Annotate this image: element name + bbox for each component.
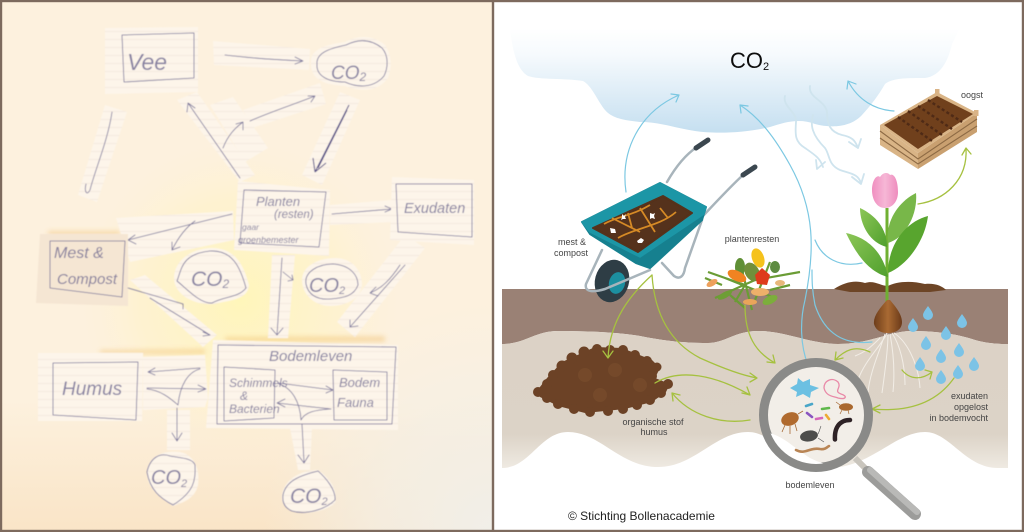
arrows: between fungi and fauna [277, 383, 333, 420]
card: Humus [38, 353, 143, 421]
arrow: Vee to manure [78, 105, 127, 202]
arrow: wheelbarrow to CO2 [625, 94, 679, 192]
soil: dark top layer [502, 289, 1008, 344]
soil mound [834, 282, 946, 292]
arrow: plants down to soil life [268, 255, 295, 338]
card: Exudaten: Exudaten [404, 201, 465, 217]
arrow: exudates to soil life [337, 235, 425, 337]
arrows: green flows to soil life and humus [603, 275, 954, 421]
organism: isopod [799, 426, 824, 443]
arrow: plants to exudates [330, 200, 392, 225]
card: Planten (resten) [234, 181, 330, 256]
arrow: soil life to CO2 [740, 105, 811, 365]
label: exudaten opgelost in bodemvocht: in bodemvocht [929, 413, 988, 423]
box: Schimmels & Bacterien: & [240, 389, 248, 403]
organism: blue protist [790, 378, 819, 398]
roots [855, 333, 920, 393]
arrows: manure to soil life [128, 275, 217, 347]
label: exudaten opgelost in bodemvocht: opgelost [954, 402, 988, 412]
icon: harvest crate [880, 89, 978, 169]
icon: wheelbarrow [582, 140, 755, 306]
icon: plant remains [705, 247, 800, 310]
text: CO2 title: CO [730, 48, 763, 73]
arrow: CO2 to plants [302, 92, 360, 185]
box: Schimmels & Bacterien [224, 367, 288, 421]
text: CO2 title: 2 [763, 61, 769, 73]
label: mest & compost [554, 237, 589, 258]
box: Bodem Fauna: Fauna [337, 395, 374, 410]
arrow: Vee to CO2 [213, 41, 310, 70]
card: Planten (resten): groenbemester [238, 235, 300, 245]
icon: magnifying glass with soil life [760, 362, 917, 514]
organism: brown mite [779, 410, 803, 434]
panel: illustrated carbon cycle [502, 52, 1008, 522]
organism: small bacteria [806, 404, 829, 419]
box: Bodem Fauna [333, 370, 387, 420]
arrows: humus and soil life exchange [143, 355, 208, 410]
cloud: CO2 atmosphere [510, 28, 960, 133]
cloud: CO2 from soil life: CO [290, 485, 322, 508]
tulip flower [872, 173, 898, 208]
cloud: CO2 middle left [174, 248, 249, 304]
arrow: harvest to CO2 [847, 81, 894, 111]
arrow: tulip to harvest [918, 148, 971, 204]
icon: tulip with bulb [834, 173, 946, 393]
soil: light lower layer [502, 331, 1008, 468]
label: organische stof humus: humus [640, 427, 668, 437]
label: organische stof humus: organische stof [622, 417, 684, 427]
cloud: CO2 top: 2 [358, 70, 366, 84]
cloud: CO2 from humus: 2 [180, 478, 187, 490]
arrows: plant remains to Vee [177, 92, 268, 182]
cloud: CO2 from soil life: 2 [320, 496, 328, 508]
text: copyright: © Stichting Bollenacademie [568, 509, 715, 523]
cloud: CO2 top: CO [331, 63, 360, 84]
cloud: CO2 top [311, 37, 391, 90]
arrow: plant remains to CO2 [243, 83, 326, 128]
label: mest & compost: compost [554, 248, 589, 258]
card: Exudaten [390, 177, 474, 245]
label: plantenresten: plantenresten [725, 234, 779, 244]
label: bodemleven: bodemleven [785, 480, 835, 490]
panel: photo of paper sketch [0, 0, 493, 532]
arrows: plants to manure [116, 211, 234, 262]
box: Schimmels & Bacterien: Schimmels [229, 376, 288, 390]
label: mest & compost: mest & [558, 237, 586, 247]
card: Mest & Compost [36, 234, 128, 306]
cloud: CO2 middle right: CO [309, 275, 339, 297]
card: Mest & Compost: Mest & [54, 245, 104, 262]
box: Schimmels & Bacterien: Bacterien [229, 402, 280, 416]
organism: pink worm [824, 380, 845, 399]
arrow: humus to CO2 [167, 408, 190, 450]
cloud: CO2 middle right: 2 [338, 285, 345, 297]
cloud: CO2 middle left: 2 [222, 277, 230, 291]
card: Mest & Compost: Compost [57, 271, 118, 288]
label: oogst: oogst [961, 90, 984, 100]
label: organische stof humus [622, 417, 684, 437]
icon: water droplets [908, 306, 979, 384]
organism: small beetle [836, 402, 853, 414]
cloud: CO2 middle left: CO [191, 268, 222, 291]
arrows: pale incoming CO2 [785, 86, 864, 184]
paper card: Vee [105, 27, 198, 94]
cloud: CO2 middle right [302, 258, 362, 306]
card: Planten (resten): gaar [242, 222, 260, 232]
card: Bodemleven [206, 340, 398, 430]
card: Planten (resten): Planten [256, 194, 300, 209]
arrow: soil life to CO2 [290, 424, 312, 470]
label: exudaten opgelost in bodemvocht: exudaten [951, 391, 988, 401]
paper card: Vee: Vee [127, 49, 167, 75]
box: Bodem Fauna: Bodem [339, 375, 380, 390]
label: exudaten opgelost in bodemvocht [929, 391, 988, 423]
organism: earthworm [796, 446, 829, 452]
card: Humus: Humus [62, 379, 123, 400]
cloud: CO2 from humus [147, 452, 198, 506]
cloud: CO2 from soil life [282, 470, 336, 513]
arrow: plant and roots to CO2 path [812, 240, 872, 343]
bulb [874, 300, 902, 333]
card: Bodemleven: Bodemleven [269, 348, 352, 365]
icon: humus pile [533, 344, 673, 417]
cloud: CO2 from humus: CO [151, 467, 181, 489]
organism: centipede [835, 420, 850, 440]
card: Planten (resten): (resten) [274, 209, 314, 221]
